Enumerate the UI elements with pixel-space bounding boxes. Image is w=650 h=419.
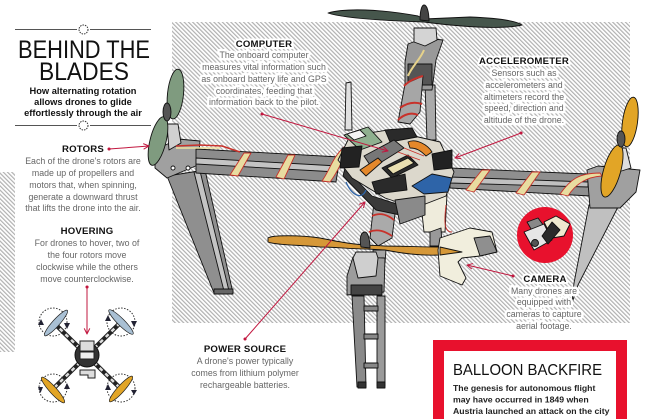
text: hovering: For drones to hover, two of (35, 238, 140, 248)
text: accelerometer: altitude of the drone. (484, 115, 564, 125)
front arm and legs of drone (268, 202, 460, 388)
text: computer: The onboard computer (220, 50, 309, 60)
text: power source: A drone's power typically (197, 356, 294, 366)
callout: balloon backfire: BALLOON BACKFIRE (453, 362, 602, 379)
text: rotors: that lifts the drone into the air. (25, 203, 141, 213)
text: accelerometer (479, 56, 569, 125)
text: accelerometer: altimeters record the (484, 92, 564, 102)
text: camera: CAMERA (523, 274, 567, 285)
text: rotors: generate a downward thrust (28, 192, 138, 202)
text: camera (506, 274, 582, 331)
right arm, rotor and leg (450, 96, 641, 303)
title block: effortlessly through the air (24, 108, 142, 118)
text: hovering: HOVERING (61, 226, 113, 237)
text: computer: coordinates, feeding that (216, 86, 313, 96)
callout: balloon backfire (433, 340, 627, 419)
arrows (87, 114, 521, 339)
text: camera: Many drones are (511, 286, 577, 296)
text: hovering: the four rotors move (48, 250, 126, 260)
title block: allows drones to glide (34, 97, 132, 107)
title block: BLADES (39, 58, 129, 86)
drone hub with electronics (338, 82, 454, 224)
text: camera: equipped with (517, 297, 571, 307)
text: camera: cameras to capture (506, 309, 582, 319)
text: rotors (25, 144, 141, 213)
text: rotors: ROTORS (62, 144, 104, 155)
title block: How alternating rotation (30, 86, 137, 96)
text: computer: COMPUTER (236, 39, 292, 50)
text: power source: rechargeable batteries. (200, 380, 290, 390)
text: hovering: clockwise while the others (36, 262, 138, 272)
title block: BEHIND THE (18, 36, 150, 64)
callout: balloon backfire: may have occurred in 1849 when (453, 394, 589, 404)
camera inset badge (517, 207, 573, 263)
text: camera: aerial footage. (516, 321, 572, 331)
title block (15, 25, 151, 130)
text: power source: comes from lithium polymer (191, 368, 299, 378)
left arm, rotor and leg (144, 68, 348, 294)
text: accelerometer: ACCELEROMETER (479, 56, 569, 67)
text: accelerometer: accelerometers and (485, 80, 563, 90)
text: rotors: made up of propellers and (32, 168, 134, 178)
callout: balloon backfire: The genesis for autonomous flight (453, 383, 595, 393)
top arm and rotor (328, 5, 522, 140)
text: computer (201, 39, 327, 107)
text: hovering: move counterclockwise. (40, 274, 134, 284)
text: power source (191, 344, 299, 390)
text: accelerometer: speed, direction and (484, 103, 564, 113)
small hovering drone diagram (38, 308, 137, 405)
text: power source: POWER SOURCE (204, 344, 287, 355)
text: rotors: motors that, when spinning, (29, 180, 137, 190)
text: computer: as onboard battery life and GPS (201, 74, 327, 84)
text: accelerometer: Sensors such as (491, 68, 557, 78)
text: computer: measures vital information such (202, 62, 326, 72)
text: computer: information back to the pilot. (209, 97, 319, 107)
callout: balloon backfire: Austria launched an attack on the city (453, 406, 610, 416)
text: hovering (35, 226, 140, 284)
hatched background panel (0, 22, 630, 352)
text: rotors: Each of the drone's rotors are (25, 156, 141, 166)
camera gimbal (420, 194, 497, 285)
